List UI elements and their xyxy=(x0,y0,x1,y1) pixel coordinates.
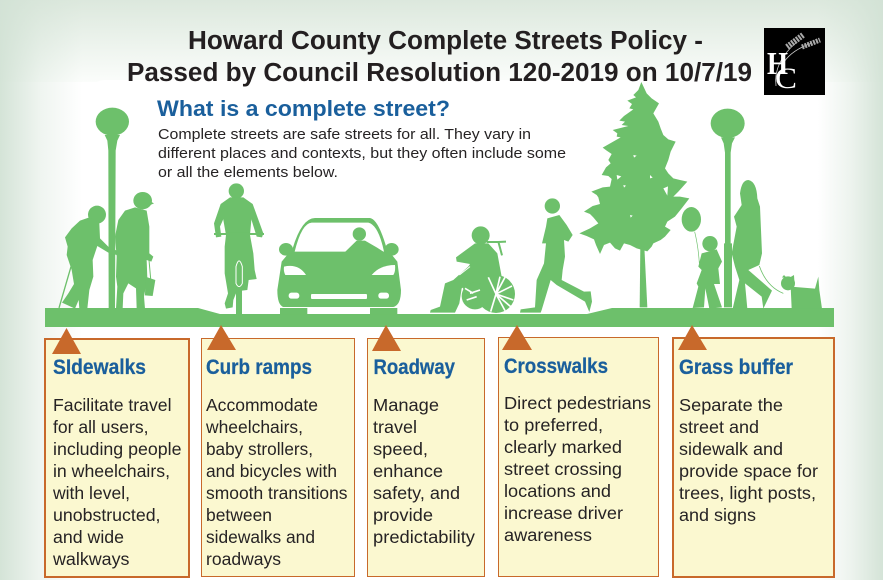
grass buffer text: trees, light posts, xyxy=(679,483,816,503)
crosswalks text xyxy=(504,393,651,545)
roadway text: predictability xyxy=(373,527,475,547)
logo: Howard County wheat HC xyxy=(764,28,825,95)
person in wheelchair xyxy=(430,226,515,313)
crosswalks text: street crossing xyxy=(504,459,622,479)
panel: sidewalks xyxy=(45,339,189,577)
arrow: crosswalks xyxy=(502,325,532,350)
crosswalks heading: Crosswalks xyxy=(504,355,608,378)
sidewalks text: for all users, xyxy=(53,417,148,437)
sidewalks heading: SIdewalks xyxy=(53,356,146,379)
sidewalks text: including people xyxy=(53,439,182,459)
grass buffer heading: Grass buffer xyxy=(679,356,793,379)
sidewalks text: unobstructed, xyxy=(53,505,160,525)
arrow: sidewalks xyxy=(52,328,81,354)
tree xyxy=(579,82,689,307)
grass buffer text: street and xyxy=(679,417,759,437)
curb ramps text: baby strollers, xyxy=(206,439,313,459)
right street scene xyxy=(430,82,822,313)
sidewalks text: and wide xyxy=(53,527,124,547)
lamp post left xyxy=(96,108,129,310)
panel: crosswalks xyxy=(498,338,658,576)
intro text: or all the elements below. xyxy=(158,165,338,181)
roadway heading: Roadway xyxy=(374,356,455,379)
cyclist xyxy=(214,183,264,314)
sidewalks text: walkways xyxy=(52,549,130,569)
grass buffer text: provide space for xyxy=(679,461,818,481)
title: Howard County Complete Streets Policy - xyxy=(188,27,703,55)
grass buffer text: Separate the xyxy=(679,395,783,415)
logo: Howard County wheat HC: H xyxy=(767,45,788,81)
curb ramps text: and bicycles with xyxy=(206,461,337,481)
crosswalks text: increase driver xyxy=(504,503,623,523)
crosswalks text: locations and xyxy=(504,481,611,501)
curb ramps heading: Curb ramps xyxy=(206,356,312,379)
crosswalks text: Direct pedestrians xyxy=(504,393,651,413)
arrow: curb ramps xyxy=(207,325,236,350)
curb ramps text: wheelchairs, xyxy=(205,417,303,437)
roadway text xyxy=(373,395,475,547)
curb ramps text: sidewalks and xyxy=(206,527,315,547)
sidewalks text: in wheelchairs, xyxy=(53,461,170,481)
crosswalks text: awareness xyxy=(504,525,592,545)
roadway text: travel xyxy=(373,417,417,437)
curb ramps text: smooth transitions xyxy=(206,483,348,503)
title xyxy=(127,27,752,87)
intro text: Complete streets are safe streets for all. They vary in xyxy=(158,127,531,143)
curb ramps text xyxy=(205,395,348,569)
arrow: roadway xyxy=(372,325,401,351)
balloon and child xyxy=(682,207,722,309)
person with bag xyxy=(115,192,155,309)
left street scene xyxy=(59,108,401,315)
intro text: different places and contexts, but they often include some xyxy=(158,146,566,162)
arrow: grass buffer xyxy=(678,325,707,350)
car with driver xyxy=(277,218,401,315)
intro text xyxy=(158,127,566,181)
grass buffer text xyxy=(679,395,818,525)
grass buffer text: sidewalk and xyxy=(679,439,783,459)
sidewalks text: with level, xyxy=(52,483,130,503)
crosswalks text: clearly marked xyxy=(504,437,622,457)
panel: curb ramps xyxy=(202,338,354,576)
roadway text: provide xyxy=(373,505,433,525)
curb ramps text: roadways xyxy=(206,549,281,569)
logo: Howard County wheat HC: C xyxy=(775,62,797,95)
runner xyxy=(520,198,592,313)
curb ramps text: between xyxy=(206,505,272,525)
grass buffer text: and signs xyxy=(679,505,756,525)
panel: grass buffer xyxy=(673,338,834,577)
curb ramps text: Accommodate xyxy=(206,395,318,415)
roadway text: Manage xyxy=(373,395,439,415)
panel: roadway xyxy=(368,338,484,576)
heading: what is a complete street: What is a complete street? xyxy=(157,96,450,121)
ground: sidewalk and road xyxy=(45,308,834,327)
dog xyxy=(781,275,822,309)
title: Passed by Council Resolution 120-2019 on 10/7/19 xyxy=(127,59,752,87)
crosswalks text: to preferred, xyxy=(504,415,603,435)
roadway text: enhance xyxy=(373,461,443,481)
roadway text: speed, xyxy=(373,439,428,459)
sidewalks text: Facilitate travel xyxy=(53,395,172,415)
roadway text: safety, and xyxy=(373,483,460,503)
person with cane xyxy=(59,206,117,309)
lamp post right xyxy=(711,109,745,307)
woman walking dog xyxy=(732,180,783,309)
sidewalks text xyxy=(52,395,182,569)
